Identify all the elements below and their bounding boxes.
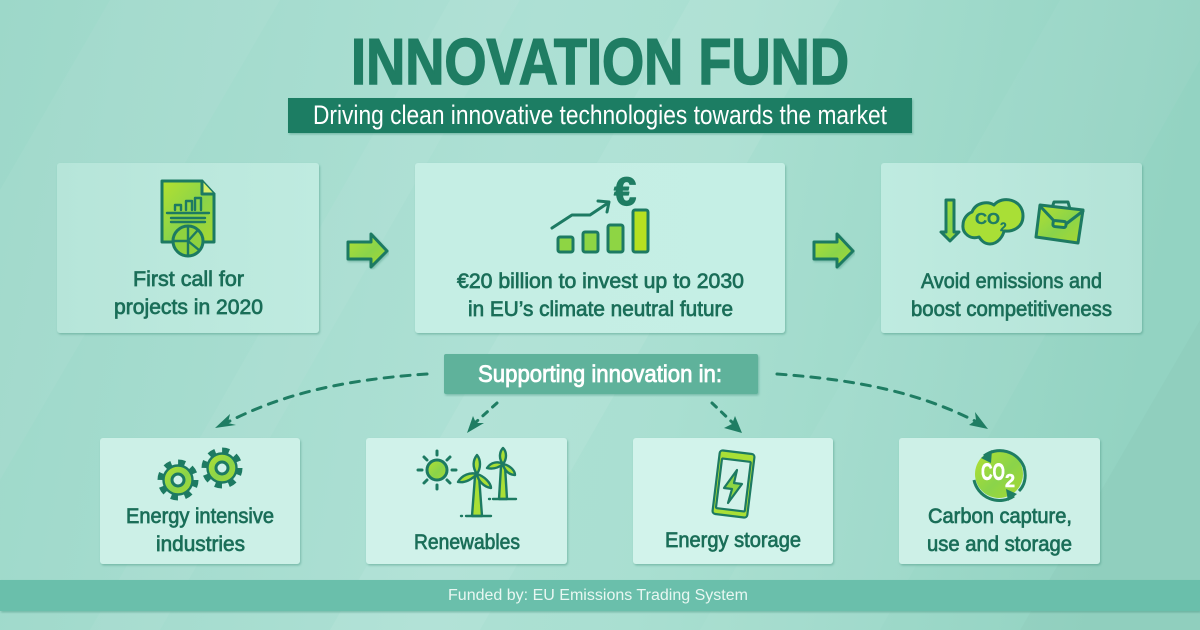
icon: down arrow — [941, 200, 959, 241]
panel: carbon capture — [899, 438, 1100, 564]
icon: briefcase — [1036, 202, 1083, 243]
icon: gears — [160, 450, 240, 498]
text: carbon capture — [927, 505, 1072, 556]
panel: first call — [57, 163, 319, 333]
icon: co2 cloud — [963, 200, 1023, 244]
text: carbon capture: use and storage — [927, 533, 1072, 556]
arrow: to carbon capture — [777, 374, 988, 429]
arrow: to renewables — [467, 403, 497, 433]
panel: avoid emissions — [881, 163, 1142, 333]
icon: co2 cloud: 2 — [1000, 220, 1007, 234]
footer bar: Funded by: EU Emissions Trading System — [448, 587, 748, 604]
text: first call — [114, 268, 263, 319]
text: 20 billion: in EU’s climate neutral future — [468, 298, 733, 321]
icon: co2 cycle — [974, 450, 1025, 501]
text: energy intensive industries: Energy intensive — [126, 505, 274, 528]
text: first call: First call for — [133, 268, 244, 291]
arrow: second to third — [814, 234, 853, 267]
panel: energy intensive industries — [100, 438, 300, 564]
icon: co2 cycle: 2 — [1005, 471, 1015, 491]
text: renewables: Renewables — [414, 531, 520, 554]
text: first call: projects in 2020 — [114, 296, 263, 319]
text: 20 billion: €20 billion to invest up to 2030 — [457, 270, 744, 293]
text: energy intensive industries: industries — [156, 533, 245, 556]
panel: 20 billion — [415, 163, 785, 333]
panel: energy storage — [633, 438, 833, 564]
supporting innovation label: Supporting innovation in: — [478, 361, 722, 388]
arrow: first to second — [348, 234, 387, 267]
text: carbon capture: Carbon capture, — [928, 505, 1072, 528]
title: INNOVATION FUND — [351, 25, 849, 98]
icon: co2 cloud: CO — [975, 211, 1000, 228]
icon: rising bars with euro: € — [614, 170, 636, 214]
text: avoid emissions: boost competitiveness — [911, 298, 1112, 321]
icon: document with charts — [162, 181, 214, 256]
arrow: to energy storage — [712, 403, 742, 433]
supporting innovation label — [444, 354, 758, 394]
icon: phone battery — [712, 450, 755, 518]
footer bar — [0, 580, 1200, 611]
icon: co2 cycle: CO — [981, 459, 1005, 486]
icon: wind turbines — [458, 448, 516, 516]
subtitle banner: Driving clean innovative technologies towards the market — [313, 100, 887, 130]
text: avoid emissions — [911, 270, 1112, 321]
text: avoid emissions: Avoid emissions and — [921, 270, 1102, 293]
text: energy storage: Energy storage — [665, 529, 801, 552]
text: energy intensive industries — [126, 505, 274, 556]
icon: sun — [418, 451, 456, 489]
arrow: to industries — [215, 374, 427, 428]
text: 20 billion — [457, 270, 744, 321]
icon: rising bars with euro — [552, 170, 648, 252]
panel: renewables — [366, 438, 567, 564]
